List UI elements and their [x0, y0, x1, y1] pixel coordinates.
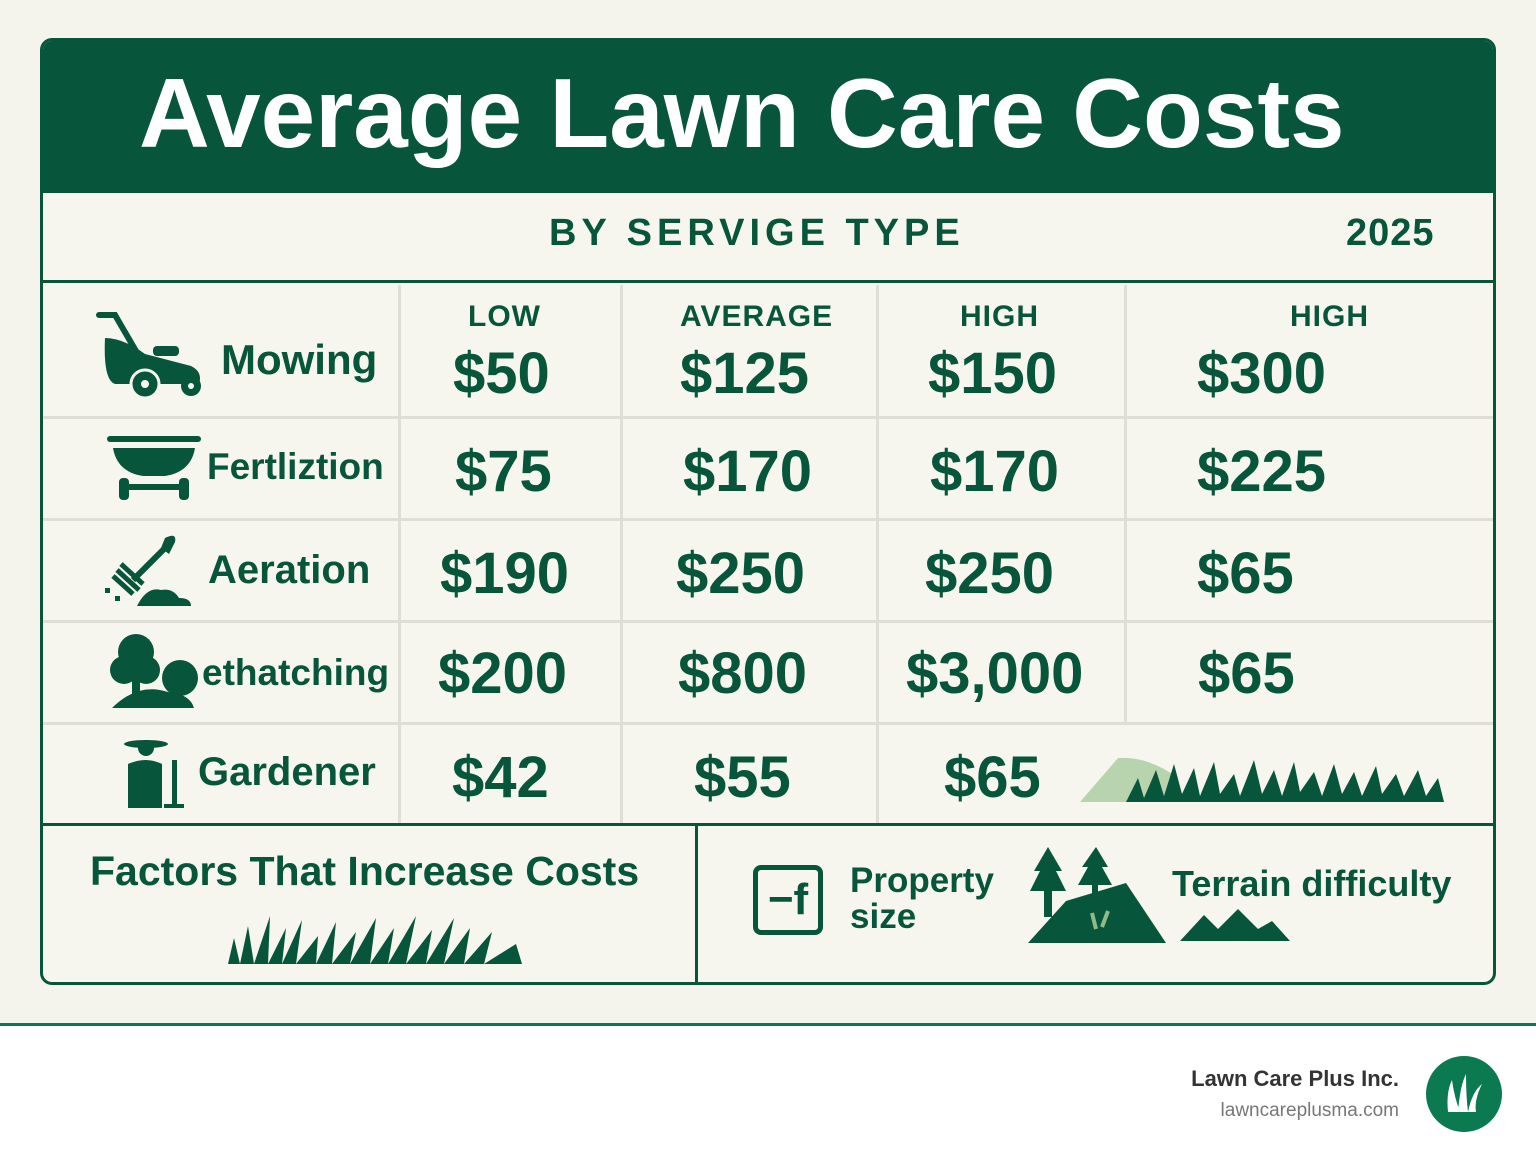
- row: fertilization: Fertliztion: [207, 446, 384, 487]
- panel: factors heading: Factors That Increase Costs: [90, 848, 639, 894]
- row: gardener: [124, 740, 1444, 810]
- row: gardener: $55: [694, 745, 791, 810]
- grass icon: [228, 916, 522, 964]
- row: gardener: Gardener: [198, 750, 376, 794]
- icon: gardener: [124, 740, 184, 808]
- subheader row: [43, 192, 1493, 283]
- row: mowing: Mowing: [221, 336, 377, 383]
- row: dethatching: $3,000: [906, 641, 1083, 706]
- row: aeration: Aeration: [208, 548, 370, 592]
- row: dethatching: ethatching: [202, 652, 389, 693]
- icon: property size: −f: [768, 875, 808, 924]
- main panel: [40, 38, 1496, 985]
- row: aeration: $250: [676, 541, 805, 606]
- icon: trees hill: [1028, 847, 1166, 943]
- row: fertilization: [107, 436, 1326, 504]
- row: mowing: $300: [1197, 341, 1326, 406]
- row: aeration: $65: [1197, 541, 1294, 606]
- title banner: [43, 41, 1493, 193]
- row: fertilization: $170: [930, 439, 1059, 504]
- panel: factors heading: [90, 848, 639, 964]
- subtitle: BY SERVIGE TYPE: [549, 212, 965, 254]
- column headers: AVERAGE: [680, 300, 833, 333]
- row: fertilization: $170: [683, 439, 812, 504]
- icon: spreader: [107, 436, 201, 500]
- grass decoration: [1080, 758, 1444, 802]
- row: fertilization: $225: [1197, 439, 1326, 504]
- website: lawncareplusma.com: [1221, 1100, 1399, 1121]
- bottom divider lines: [43, 823, 1493, 826]
- icon: aerator: [105, 536, 191, 606]
- row: gardener: $42: [452, 745, 549, 810]
- footer: [0, 1023, 1536, 1157]
- row: dethatching: [110, 634, 1295, 708]
- panel: factors icons: size: [850, 897, 916, 936]
- row: aeration: $190: [440, 541, 569, 606]
- column headers: [468, 300, 1369, 333]
- logo: [1426, 1056, 1502, 1132]
- row: aeration: [105, 536, 1294, 606]
- title banner: Average Lawn Care Costs: [139, 58, 1344, 168]
- year: 2025: [1346, 212, 1435, 254]
- row: mowing: $50: [453, 341, 550, 406]
- panel: factors icons: Terrain difficulty: [1172, 863, 1451, 904]
- row: mowing: [96, 312, 1326, 406]
- company name: Lawn Care Plus Inc.: [1191, 1066, 1399, 1091]
- row: fertilization: $75: [455, 439, 552, 504]
- column headers: LOW: [468, 300, 541, 333]
- row: dethatching: $800: [678, 641, 807, 706]
- row: mowing: $150: [928, 341, 1057, 406]
- panel: factors icons: Property: [850, 861, 994, 900]
- column headers: HIGH: [960, 300, 1039, 333]
- column headers: HIGH: [1290, 300, 1369, 333]
- row: dethatching: $200: [438, 641, 567, 706]
- icon: trees: [110, 634, 198, 708]
- row: dethatching: $65: [1198, 641, 1295, 706]
- icon: lawn mower: [96, 312, 201, 396]
- row: gardener: $65: [944, 745, 1041, 810]
- panel: factors icons: [753, 847, 1452, 943]
- icon: property size: [753, 865, 823, 935]
- small hills: [1180, 909, 1290, 941]
- row: mowing: $125: [680, 341, 809, 406]
- row: aeration: $250: [925, 541, 1054, 606]
